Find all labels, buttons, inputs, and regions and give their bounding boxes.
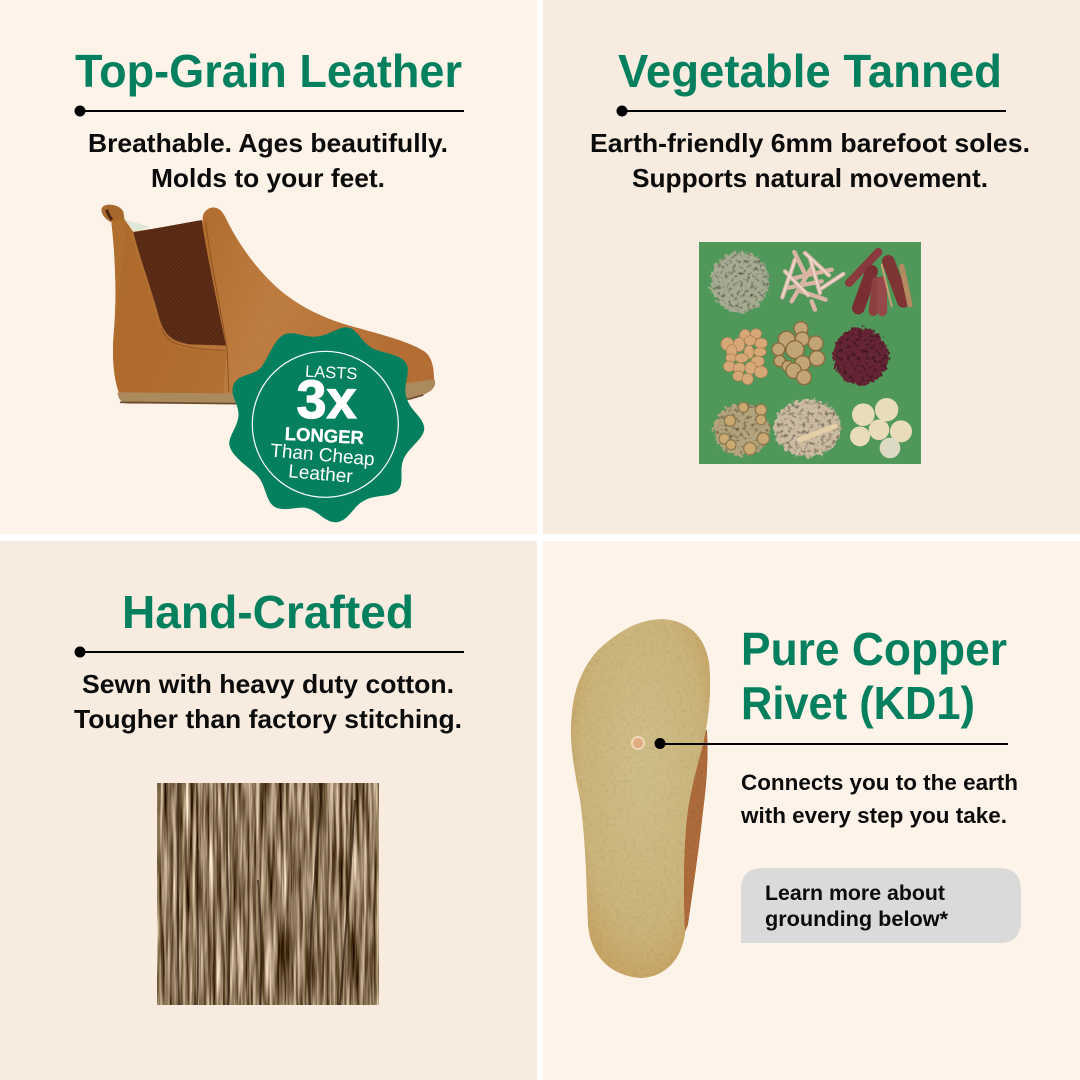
badge: lasts 3x longer: Than Cheap [269,441,375,471]
panel: hand-crafted [0,541,537,1080]
panel: pure copper rivet [543,541,1080,1080]
badge: lasts 3x longer [229,327,424,522]
text: stitching benefits: Sewn with heavy duty cotton. [82,669,454,699]
callout: learn more: Learn more about [765,882,945,905]
sole [118,379,435,404]
elastic gusset [133,220,226,346]
text: grounding benefit: Connects you to the earth [741,770,1018,795]
text: leather benefits [88,128,448,193]
badge: lasts 3x longer: LONGER [284,423,364,448]
text: sole benefits: Supports natural movement. [632,163,988,193]
text: leather benefits: Breathable. Ages beautifully. [88,128,448,158]
divider with dot [616,106,1006,116]
text: grounding benefit [740,770,1018,828]
image: chelsea boot [101,205,435,404]
heading: Pure Copper Rivet (KD1): Rivet (KD1) [741,677,975,729]
image: cotton thread [157,783,379,1005]
copper rivet [631,736,645,750]
heading: Top-Grain Leather: Top-Grain Leather [75,45,462,97]
callout: learn more [741,868,1021,943]
panel: top-grain leather [0,0,537,534]
divider with dot [654,738,1008,749]
badge: lasts 3x longer: 3x [296,370,357,430]
divider with dot [74,646,464,658]
panel: vegetable tanned [543,0,1080,534]
text: grounding benefit: with every step you take. [740,803,1007,828]
text: sole benefits [590,128,1030,193]
callout: learn more: grounding below* [765,908,949,931]
badge: lasts 3x longer: LASTS [305,363,358,383]
badge: lasts 3x longer: Leather [287,461,354,488]
text: stitching benefits [74,669,462,734]
heading: Pure Copper Rivet (KD1) [741,623,1007,729]
text: leather benefits: Molds to your feet. [151,163,385,193]
divider with dot [74,106,464,116]
image: tanning ingredients [699,242,921,464]
image: boot sole with copper rivet [571,619,710,978]
heading: Pure Copper Rivet (KD1): Pure Copper [741,623,1007,675]
heading: Vegetable Tanned: Vegetable Tanned [618,45,1002,97]
heading: Hand-Crafted: Hand-Crafted [122,586,414,638]
text: stitching benefits: Tougher than factory stitching. [74,704,462,734]
text: sole benefits: Earth-friendly 6mm barefoot soles. [590,128,1030,158]
